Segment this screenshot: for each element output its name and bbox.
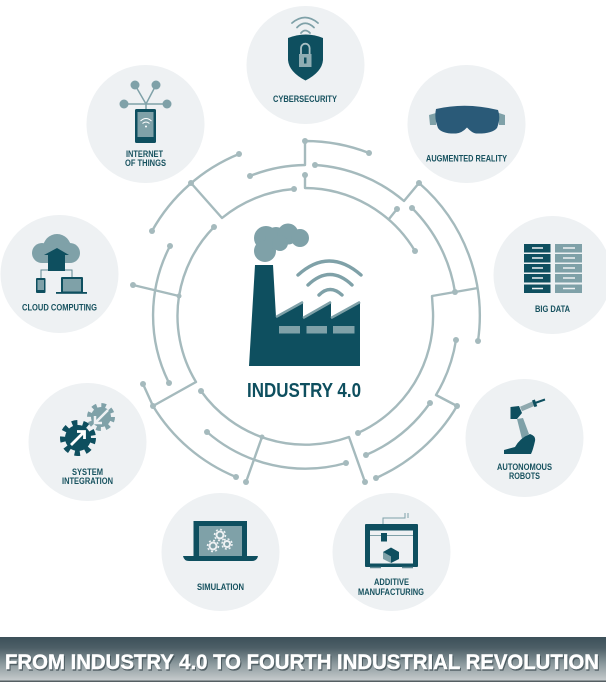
icon: 3D printer xyxy=(365,513,418,568)
panel: additive manufacturing: MANUFACTURING xyxy=(358,587,424,598)
icon: robot arm xyxy=(504,399,545,454)
panel: simulation xyxy=(162,493,280,611)
panel: additive manufacturing xyxy=(332,493,450,611)
panel: autonomous robots xyxy=(466,379,584,497)
panel: big data: BIG DATA xyxy=(535,304,570,315)
icon: laptop with gears xyxy=(183,521,258,561)
panel: internet of things xyxy=(86,65,204,183)
panel: autonomous robots: AUTONOMOUS xyxy=(497,462,552,473)
panel: autonomous robots: ROBOTS xyxy=(509,471,540,482)
panel: augmented reality xyxy=(408,65,526,183)
icon: server racks xyxy=(524,244,582,293)
panel: internet of things: OF THINGS xyxy=(125,158,166,169)
panel: internet of things: INTERNET xyxy=(126,149,163,160)
icon: gears xyxy=(63,406,112,453)
icon: phone with connected nodes xyxy=(120,80,172,143)
panel: simulation: SIMULATION xyxy=(197,582,244,593)
panel: cybersecurity xyxy=(246,6,364,124)
banner xyxy=(0,637,606,682)
circuit rings xyxy=(130,138,481,485)
panel: system integration: SYSTEM xyxy=(72,467,103,478)
panel: system integration: INTEGRATION xyxy=(62,476,113,487)
icon: cloud with devices xyxy=(32,234,87,294)
panel: cybersecurity: CYBERSECURITY xyxy=(273,94,338,105)
icon: shield with lock xyxy=(288,18,323,80)
panel: system integration xyxy=(28,383,146,501)
heading: Industry 4.0: INDUSTRY 4.0 xyxy=(247,380,361,402)
panel: augmented reality: AUGMENTED REALITY xyxy=(426,154,508,164)
icon: AR headset xyxy=(429,106,505,134)
panel: big data xyxy=(494,216,606,334)
central factory icon xyxy=(249,224,361,366)
panel: additive manufacturing: ADDITIVE xyxy=(374,577,409,588)
panel: cloud computing xyxy=(0,215,118,333)
panel: cloud computing: CLOUD COMPUTING xyxy=(22,302,97,314)
